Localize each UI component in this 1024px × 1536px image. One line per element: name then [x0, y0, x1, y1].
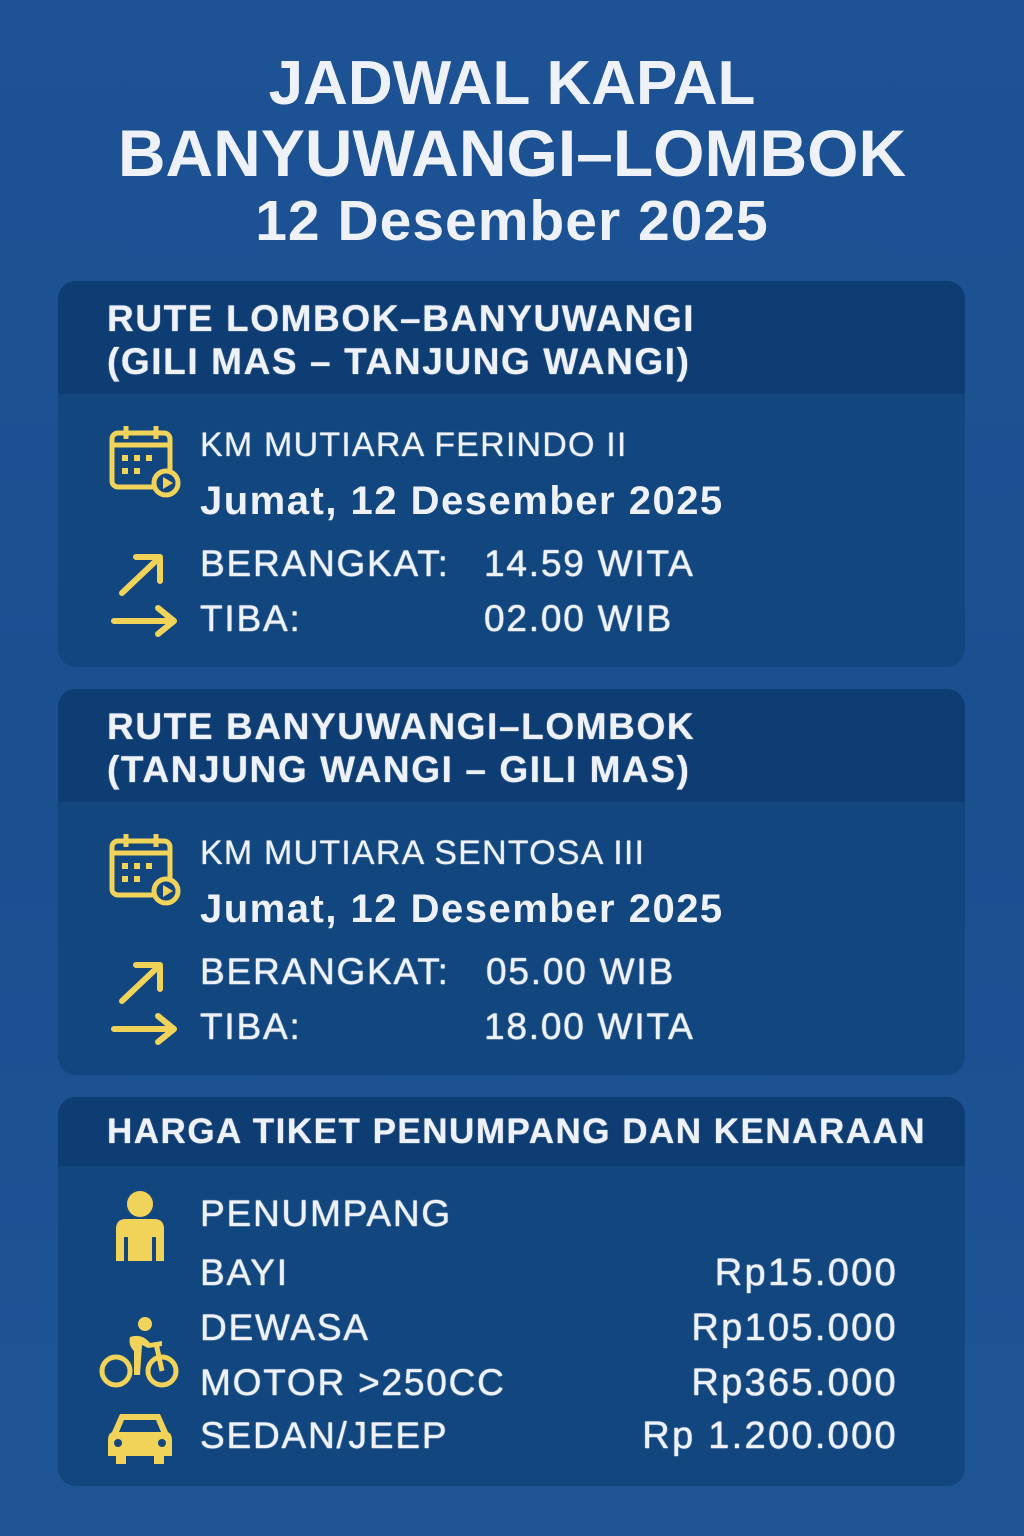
panel: ticket prices: Rp 1.200.000: [642, 1415, 898, 1457]
departure: BERANGKAT:: [200, 543, 450, 584]
price: sedan: SEDAN/JEEP: [200, 1415, 448, 1456]
arrival: TIBA:: [200, 598, 302, 639]
panel: route Banyuwangi-Lombok: 18.00 WITA: [484, 1006, 695, 1047]
price: bayi: BAYI: [200, 1252, 289, 1293]
panel header: [58, 689, 965, 802]
icon: bicycle: [100, 1317, 178, 1388]
panel: ticket prices: Rp365.000: [691, 1362, 898, 1404]
arrival: TIBA:: [200, 1006, 302, 1047]
price: dewasa: DEWASA: [200, 1307, 370, 1348]
panel: ticket prices: [58, 1097, 965, 1486]
icon: car: [108, 1414, 172, 1464]
panel: route Lombok-Banyuwangi: [58, 281, 965, 667]
ship name: KM MUTIARA SENTOSA III: [200, 834, 645, 872]
panel: ticket prices: Rp105.000: [691, 1307, 898, 1349]
price: motor: MOTOR >250CC: [200, 1362, 506, 1403]
date: Jumat, 12 Desember 2025: [200, 479, 724, 523]
title: BANYUWANGI–LOMBOK: [118, 116, 906, 190]
title: 12 Desember 2025: [255, 189, 769, 253]
panel: route Banyuwangi-Lombok: [58, 689, 965, 1075]
date: Jumat, 12 Desember 2025: [200, 887, 724, 931]
panel: route Banyuwangi-Lombok: 05.00 WIB: [486, 951, 675, 992]
panel header: (TANJUNG WANGI – GILI MAS): [107, 749, 691, 790]
passenger label: PENUMPANG: [200, 1193, 452, 1234]
icon: calendar: [110, 426, 180, 498]
panel header: [58, 1097, 965, 1166]
panel header: [58, 281, 965, 394]
panel: route Lombok-Banyuwangi: 14.59 WITA: [484, 543, 695, 584]
panel header: HARGA TIKET PENUMPANG DAN KENARAAN: [107, 1112, 926, 1151]
icon: arrows: [111, 962, 177, 1045]
ship name: KM MUTIARA FERINDO II: [200, 426, 628, 464]
departure: BERANGKAT:: [200, 951, 450, 992]
panel: route Lombok-Banyuwangi: 02.00 WIB: [484, 598, 673, 639]
panel header: RUTE BANYUWANGI–LOMBOK: [107, 706, 695, 747]
panel header: (GILI MAS – TANJUNG WANGI): [107, 341, 691, 382]
panel: ticket prices: Rp15.000: [715, 1252, 898, 1294]
title: [118, 49, 906, 253]
icon: arrows: [111, 554, 177, 637]
panel header: RUTE LOMBOK–BANYUWANGI: [107, 298, 695, 339]
title: JADWAL KAPAL: [269, 49, 755, 118]
icon: person: [116, 1191, 164, 1261]
icon: calendar: [110, 834, 180, 906]
